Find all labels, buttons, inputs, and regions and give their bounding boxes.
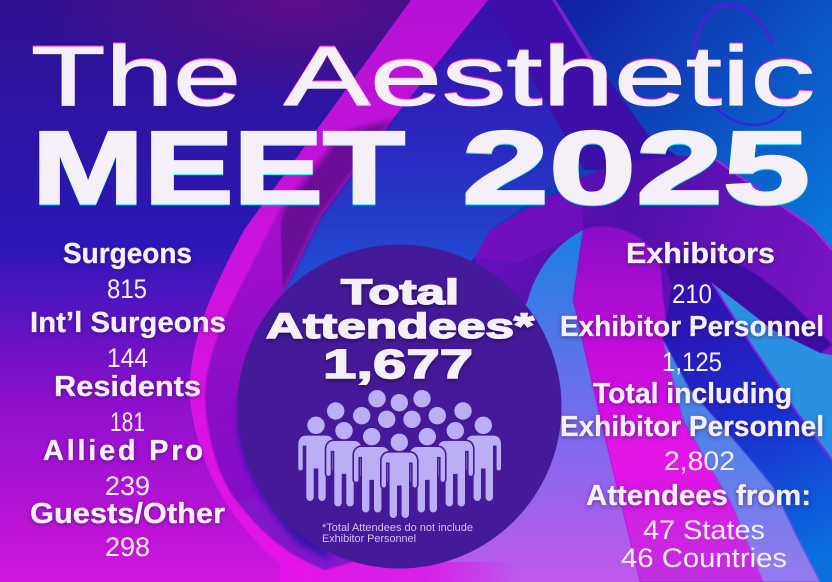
- stat: exhibitor personnel: 1,125: [662, 347, 722, 377]
- stat: guests and other: Guests/Other: [30, 498, 225, 530]
- heading: total attendees: [266, 273, 535, 346]
- stat: attendees from: [586, 480, 811, 573]
- title: The Aesthetic: The: [31, 29, 241, 123]
- stat: exhibitor personnel: Exhibitor Personnel: [560, 311, 824, 343]
- heading: total attendees: Total: [341, 273, 459, 312]
- stat: total including exhibitor personnel: Exhibitor Personnel: [560, 411, 824, 443]
- stat: surgeons: Surgeons: [63, 238, 192, 270]
- stat: exhibitors: 210: [672, 279, 712, 309]
- stat: exhibitors: [626, 238, 775, 309]
- stat: exhibitors: Exhibitors: [626, 238, 775, 270]
- footnote: [322, 522, 473, 545]
- stat: attendees from: 47 States: [643, 515, 765, 545]
- footnote: *Total Attendees do not include: [322, 522, 473, 534]
- title: MEET 2025: [32, 110, 810, 225]
- icon: crowd of people: [298, 390, 502, 519]
- stat: international surgeons: Int’l Surgeons: [30, 307, 226, 339]
- stat: surgeons: 815: [107, 274, 147, 304]
- stat: attendees from: 46 Countries: [621, 543, 787, 573]
- title: MEET 2025: 2025: [462, 110, 810, 225]
- stat: exhibitor personnel: [560, 311, 824, 377]
- stat: allied pro: [43, 435, 203, 501]
- number: total attendees: 1,677: [323, 341, 473, 387]
- panel: total attendees circle: [238, 244, 562, 568]
- stat: residents: Residents: [54, 371, 201, 403]
- stat: surgeons: [63, 238, 192, 304]
- stat: international surgeons: 144: [107, 343, 148, 373]
- stat: residents: [54, 371, 201, 437]
- stat: residents: 181: [110, 407, 145, 437]
- panel: exhibitors and reach: [560, 238, 824, 573]
- panel: attendee categories: [30, 238, 226, 562]
- stat: total including exhibitor personnel: Total including: [593, 378, 792, 410]
- stat: total including exhibitor personnel: 2,802: [664, 446, 735, 476]
- stat: attendees from: Attendees from:: [586, 480, 811, 512]
- title: The Aesthetic: [31, 29, 815, 123]
- stat: guests and other: 298: [105, 532, 150, 562]
- title: The Aesthetic: Aesthetic: [284, 29, 815, 123]
- stat: allied pro: Allied Pro: [43, 435, 203, 467]
- title: MEET 2025: MEET: [32, 110, 405, 225]
- footnote: Exhibitor Personnel: [322, 533, 416, 545]
- stat: total including exhibitor personnel: [560, 378, 824, 476]
- stat: guests and other: [30, 498, 225, 562]
- stat: allied pro: 239: [105, 471, 150, 501]
- heading: total attendees: Attendees*: [266, 307, 535, 346]
- stat: international surgeons: [30, 307, 226, 373]
